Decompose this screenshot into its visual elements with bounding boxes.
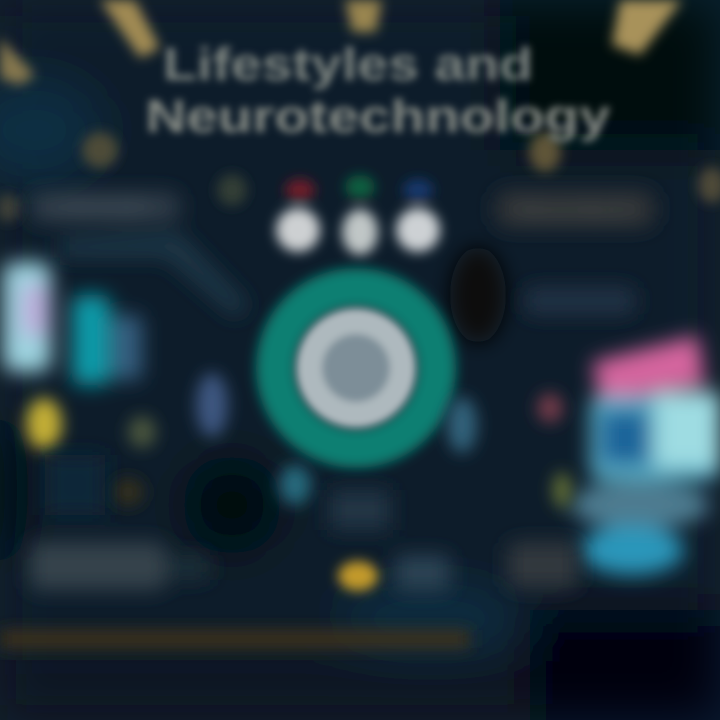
decorative gold light beams xyxy=(0,0,720,222)
chart: central teal ring xyxy=(276,288,436,448)
title: Lifestyles and xyxy=(163,38,533,90)
icons: three people xyxy=(276,175,440,255)
panel: left heading xyxy=(30,192,250,318)
title: Neurotechnology xyxy=(146,90,611,142)
text block: right caption xyxy=(508,542,578,588)
title xyxy=(146,38,611,142)
text block: left caption xyxy=(30,455,210,590)
icon: gold button xyxy=(338,561,378,591)
panel: left illustration cards xyxy=(3,262,142,385)
panel: left heading: Lifestyle xyxy=(51,194,149,221)
panel: right heading xyxy=(495,190,655,315)
inner dial xyxy=(296,308,416,428)
text block: center caption xyxy=(330,490,450,591)
footer gold bar xyxy=(0,630,470,648)
icon: small right markers xyxy=(279,393,571,508)
panel: right heading: Neurotech xyxy=(516,197,634,224)
dark blob xyxy=(450,247,506,343)
icon: yellow badge xyxy=(26,373,228,506)
panel: right illustration xyxy=(570,335,720,575)
